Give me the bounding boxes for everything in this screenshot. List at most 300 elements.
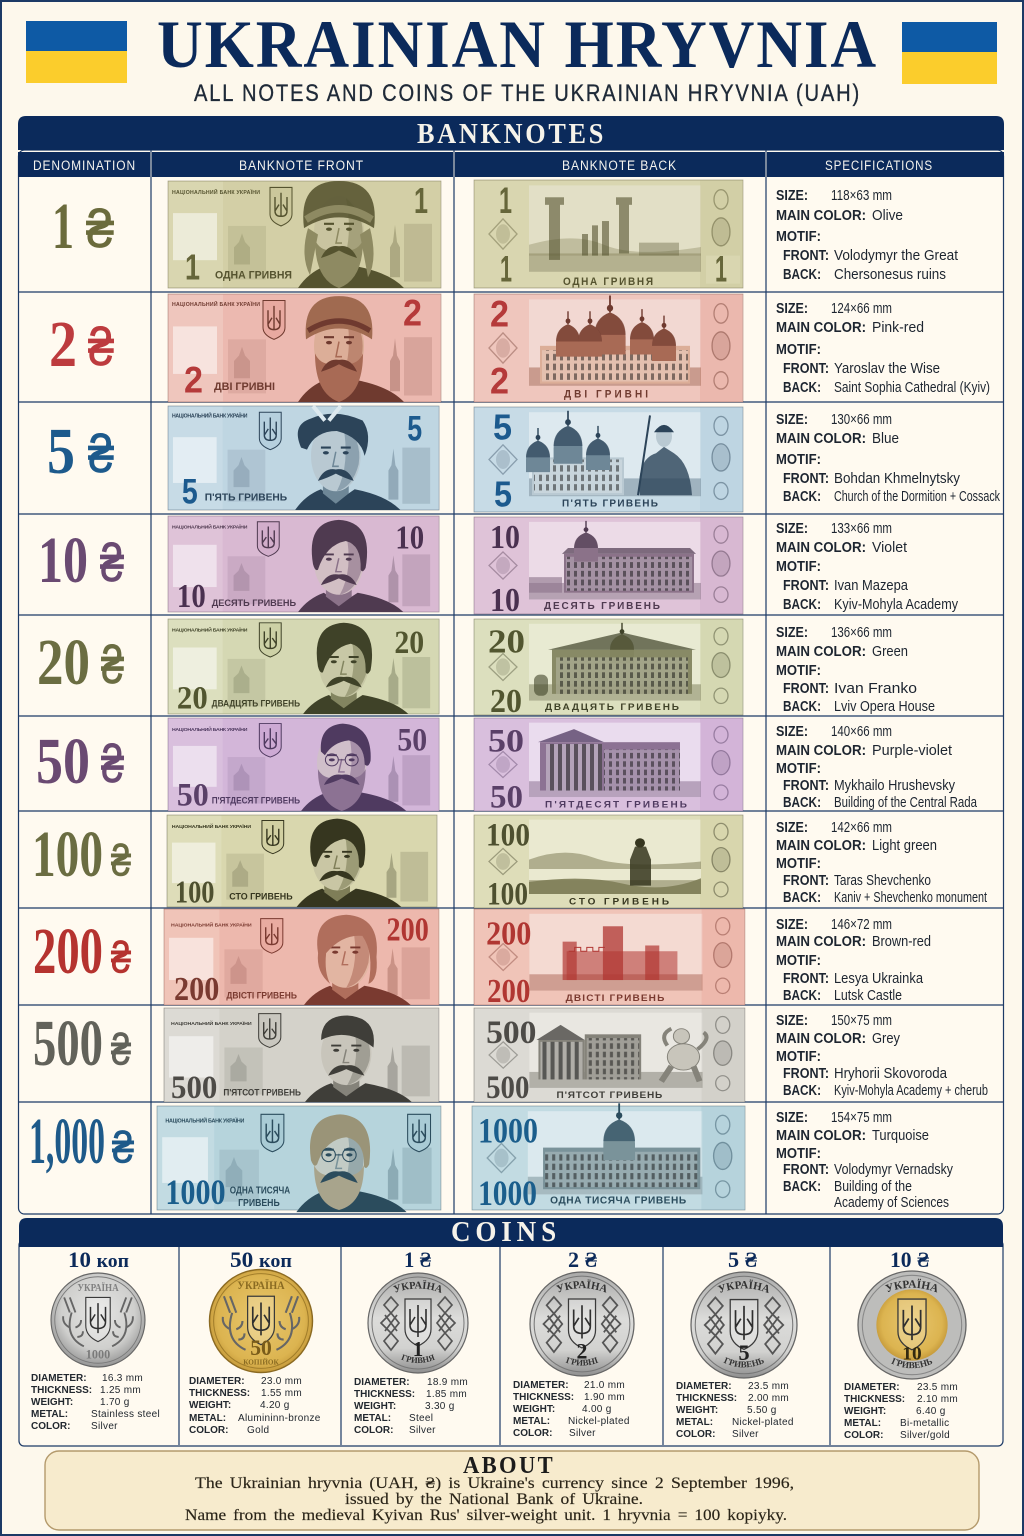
coin: 10 kopiyky bbox=[31, 1247, 160, 1432]
about text bbox=[185, 1475, 794, 1524]
specifications: 10: Ivan Mazepa bbox=[834, 578, 908, 594]
flag left bbox=[26, 21, 127, 83]
denomination: 100 hryvnia: ₴ bbox=[111, 836, 131, 885]
coin: 10 hryven: 23.5 mm bbox=[917, 1382, 958, 1393]
banknote front: 500: 500 bbox=[171, 1070, 217, 1106]
specifications: 5: BACK: bbox=[783, 489, 821, 505]
specifications: 100: Taras Shevchenko bbox=[834, 873, 931, 889]
banknote back: 1000: 1000 bbox=[478, 1110, 538, 1150]
banknote back: 10: 10 bbox=[490, 582, 520, 619]
specifications: 500: FRONT: bbox=[783, 1066, 829, 1082]
specifications: 1: MOTIF: bbox=[776, 229, 821, 245]
heading: banknotes: BANKNOTES bbox=[417, 118, 606, 150]
denomination: 10 hryvnia: ₴ bbox=[100, 534, 124, 593]
specifications: 20: Green bbox=[872, 644, 908, 660]
denomination: 200 hryvnia: 200 bbox=[33, 915, 103, 988]
denomination: 5 hryvnia bbox=[47, 415, 114, 488]
banknote back: 20: 20 bbox=[488, 623, 525, 660]
coin: 10 hryven: 10 ₴ bbox=[890, 1247, 930, 1272]
banknote back: 10: ДЕСЯТЬ ГРИВЕНЬ bbox=[544, 601, 660, 612]
coin: 5 hryven: COLOR: bbox=[676, 1429, 715, 1440]
specifications: 100: SIZE: bbox=[776, 820, 808, 836]
banknote back: 500: 500 bbox=[486, 1015, 536, 1051]
specifications: 10: 133×66 mm bbox=[831, 521, 892, 537]
coin: 1 hryvnia: Silver bbox=[409, 1425, 436, 1436]
denomination: 5 hryvnia: 5 bbox=[47, 415, 75, 488]
specifications: 20 bbox=[776, 625, 935, 715]
coin: 50 kopiyky: УКРАЇНА bbox=[237, 1279, 285, 1292]
table column headers: SPECIFICATIONS bbox=[825, 158, 933, 173]
specifications: 1: 118×63 mm bbox=[831, 188, 892, 204]
specifications: 2: Saint Sophia Cathedral (Kyiv) bbox=[834, 380, 990, 396]
denomination: 2 hryvnia: 2 bbox=[49, 308, 77, 381]
denomination: 1 hryvnia: ₴ bbox=[86, 200, 114, 259]
coin: 10 hryven: 6.40 g bbox=[916, 1406, 946, 1417]
coin: 50 kopiyky: 50 bbox=[250, 1336, 272, 1360]
banknote front: 500: НАЦІОНАЛЬНИЙ БАНК УКРАЇНИ bbox=[171, 1019, 252, 1027]
coin: 2 hryvni: 4.00 g bbox=[582, 1404, 612, 1415]
specifications: 10: BACK: bbox=[783, 597, 821, 613]
specifications: 1000: Academy of Sciences bbox=[834, 1195, 949, 1211]
panel: banknotes table frame bbox=[18, 150, 1004, 1214]
banknote front: 100 bbox=[167, 815, 437, 910]
coin: 1 hryvnia: COLOR: bbox=[354, 1425, 393, 1436]
table column headers: BANKNOTE BACK bbox=[562, 158, 677, 173]
specifications: 20: Ivan Franko bbox=[834, 681, 917, 697]
banknote front: 100: 100 bbox=[175, 874, 214, 910]
specifications: 5: FRONT: bbox=[783, 471, 829, 487]
banknote front: 1000: НАЦІОНАЛЬНИЙ БАНК УКРАЇНИ bbox=[165, 1117, 244, 1125]
banknote back: 5 bbox=[474, 407, 743, 515]
coin: 10 kopiyky: 1000 bbox=[86, 1348, 110, 1362]
specifications: 500: MAIN COLOR: bbox=[776, 1031, 866, 1047]
coin: 1 hryvnia: УКРАЇНА bbox=[392, 1280, 442, 1293]
specifications: 1: Volodymyr the Great bbox=[834, 248, 958, 264]
banknote front: 50: П'ЯТДЕСЯТ ГРИВЕНЬ bbox=[212, 796, 300, 806]
coin: 1 hryvnia: 1.85 mm bbox=[426, 1389, 467, 1400]
banknote back: 5: П'ЯТЬ ГРИВЕНЬ bbox=[562, 499, 658, 510]
specifications: 5: MOTIF: bbox=[776, 452, 821, 468]
coin: 2 hryvni: METAL: bbox=[513, 1416, 550, 1427]
specifications: 50: 140×66 mm bbox=[831, 724, 892, 740]
banknote back: 500: П'ЯТСОТ ГРИВЕНЬ bbox=[557, 1091, 662, 1101]
heading: coins bbox=[19, 1217, 1003, 1248]
heading: coins: COINS bbox=[451, 1217, 561, 1248]
banknote back: 2: 2 bbox=[490, 361, 509, 402]
specifications: 1000: Turquoise bbox=[872, 1128, 929, 1144]
banknote back: 2: 2 bbox=[490, 294, 509, 335]
denomination: 20 hryvnia: ₴ bbox=[101, 636, 124, 695]
specifications: 10: MOTIF: bbox=[776, 559, 821, 575]
specifications: 10: SIZE: bbox=[776, 521, 808, 537]
denomination: 200 hryvnia: ₴ bbox=[111, 933, 131, 982]
coin: 5 hryven: 5 bbox=[738, 1340, 750, 1365]
coin: 5 hryven: 23.5 mm bbox=[748, 1381, 789, 1392]
coin: 2 hryvni: ГРИВНІ bbox=[566, 1357, 598, 1366]
specifications: 2: Pink-red bbox=[872, 320, 924, 336]
banknote front: 20 bbox=[168, 619, 439, 716]
specifications: 500: 150×75 mm bbox=[831, 1013, 892, 1029]
coin: 10 kopiyky: DIAMETER: bbox=[31, 1373, 87, 1384]
coin: 10 hryven: УКРАЇНА bbox=[884, 1278, 938, 1292]
banknote back: 1: ОДНА ГРИВНЯ bbox=[563, 276, 653, 288]
coin: 5 hryven: 5.50 g bbox=[747, 1405, 777, 1416]
coin: 2 hryvni: DIAMETER: bbox=[513, 1380, 569, 1391]
banknote back: 5: 5 bbox=[494, 475, 512, 515]
denomination: 50 hryvnia: ₴ bbox=[101, 735, 124, 794]
coin: 50 kopiyky: 23.0 mm bbox=[261, 1376, 302, 1387]
specifications: 20: FRONT: bbox=[783, 681, 829, 697]
banknote back: 20: ДВАДЦЯТЬ ГРИВЕНЬ bbox=[545, 702, 679, 713]
about text: Name from the medieval Kyivan Rus' silver-weight unit. 1 hryvnia = 100 kopiyky. bbox=[185, 1507, 787, 1524]
specifications: 200: Brown-red bbox=[872, 934, 931, 950]
banknote front: 1 bbox=[168, 181, 441, 288]
specifications: 1000: MAIN COLOR: bbox=[776, 1128, 866, 1144]
denomination: 5 hryvnia: ₴ bbox=[88, 425, 114, 484]
banknote back: 100: 100 bbox=[486, 818, 530, 853]
banknote back: 50: 50 bbox=[490, 779, 523, 815]
coin: 5 hryven: WEIGHT: bbox=[676, 1405, 718, 1416]
banknote front: 2: ДВІ ГРИВНІ bbox=[214, 382, 275, 393]
coin: 10 kopiyky: WEIGHT: bbox=[31, 1397, 73, 1408]
specifications: 1: FRONT: bbox=[783, 248, 829, 264]
coin: 10 kopiyky: COLOR: bbox=[31, 1421, 70, 1432]
denomination: 2 hryvnia bbox=[49, 308, 114, 381]
specifications: 100: Light green bbox=[872, 838, 937, 854]
coin: 5 hryven: УКРАЇНА bbox=[717, 1279, 769, 1294]
specifications: 500: SIZE: bbox=[776, 1013, 808, 1029]
specifications: 5: MAIN COLOR: bbox=[776, 431, 866, 447]
specifications: 50: Mykhailo Hrushevsky bbox=[834, 778, 956, 794]
banknote back: 200: 200 bbox=[486, 915, 531, 952]
coin: 10 kopiyky: 10 коп bbox=[68, 1247, 129, 1272]
banknote front: 1000: 1000 bbox=[165, 1172, 226, 1212]
coin: 5 hryven: DIAMETER: bbox=[676, 1381, 732, 1392]
specifications: 200: Lesya Ukrainka bbox=[834, 971, 923, 987]
specifications: 200: Lutsk Castle bbox=[834, 988, 902, 1004]
coin: 50 kopiyky: 4.20 g bbox=[260, 1400, 290, 1411]
banknote back: 100: СТО ГРИВЕНЬ bbox=[569, 897, 669, 907]
specifications: 50: MOTIF: bbox=[776, 761, 821, 777]
denomination: 1,000 hryvnia: ₴ bbox=[112, 1123, 134, 1172]
coin: 2 hryvni: COLOR: bbox=[513, 1428, 552, 1439]
banknote front: 1: 1 bbox=[185, 247, 200, 288]
banknote front: 1: 1 bbox=[414, 181, 428, 221]
banknote front: 5: 5 bbox=[407, 410, 422, 449]
banknote back: 2 bbox=[474, 294, 743, 402]
specifications: 2 bbox=[776, 301, 990, 396]
banknote front: 20: НАЦІОНАЛЬНИЙ БАНК УКРАЇНИ bbox=[172, 625, 248, 633]
coin: 50 kopiyky: 1.55 mm bbox=[261, 1388, 302, 1399]
denomination: 500 hryvnia: ₴ bbox=[111, 1025, 131, 1074]
coin: 50 kopiyky: 50 коп bbox=[230, 1247, 292, 1272]
banknote front: 5: НАЦІОНАЛЬНИЙ БАНК УКРАЇНИ bbox=[172, 411, 248, 419]
denomination: 2 hryvnia: ₴ bbox=[88, 318, 114, 377]
panel: coins frame bbox=[19, 1240, 1003, 1446]
specifications: 200: BACK: bbox=[783, 988, 821, 1004]
banknote back: 1: 1 bbox=[499, 181, 512, 221]
heading: about: ABOUT bbox=[463, 1453, 555, 1479]
specifications: 500: BACK: bbox=[783, 1083, 821, 1099]
coin: 1 hryvnia: METAL: bbox=[354, 1413, 391, 1424]
table column headers bbox=[18, 152, 1004, 177]
coin: 10 hryven: Bi-metallic bbox=[900, 1418, 949, 1429]
banknote back: 100: 100 bbox=[487, 876, 528, 912]
coin: 10 kopiyky: 1.25 mm bbox=[100, 1385, 141, 1396]
coin: 1 hryvnia: 18.9 mm bbox=[427, 1377, 468, 1388]
coin: 10 kopiyky: Stainless steel bbox=[91, 1409, 160, 1420]
specifications: 20: MOTIF: bbox=[776, 663, 821, 679]
coin: 50 kopiyky: METAL: bbox=[189, 1413, 226, 1424]
banknote front: 5: П'ЯТЬ ГРИВЕНЬ bbox=[205, 492, 287, 504]
specifications: 50: FRONT: bbox=[783, 778, 829, 794]
banknote back: 50: П'ЯТДЕСЯТ ГРИВЕНЬ bbox=[545, 800, 687, 810]
banknote front: 500: П'ЯТСОТ ГРИВЕНЬ bbox=[223, 1088, 301, 1098]
specifications: 2: MAIN COLOR: bbox=[776, 320, 866, 336]
denomination: 1 hryvnia: 1 bbox=[52, 190, 74, 263]
banknote front: 500 bbox=[164, 1008, 439, 1106]
banknote front: 200: 200 bbox=[387, 911, 429, 948]
specifications: 1: Olive bbox=[872, 208, 903, 224]
specifications: 5 bbox=[776, 412, 1001, 505]
banknote back: 1000: 1000 bbox=[478, 1172, 537, 1213]
banknote back: 200 bbox=[474, 909, 745, 1010]
coin: 10 hryven: THICKNESS: bbox=[844, 1394, 905, 1405]
coin: 5 hryven: 5 ₴ bbox=[728, 1247, 758, 1272]
banknote front: 2 bbox=[168, 293, 441, 402]
specifications: 1000: FRONT: bbox=[783, 1162, 829, 1178]
specifications: 200: FRONT: bbox=[783, 971, 829, 987]
banknote back: 200: ДВІСТІ ГРИВЕНЬ bbox=[566, 993, 664, 1004]
banknote back: 10: 10 bbox=[490, 519, 520, 556]
coin: 5 hryven: METAL: bbox=[676, 1417, 713, 1428]
coin: 10 hryven: COLOR: bbox=[844, 1430, 883, 1441]
specifications: 500: Hryhorii Skovoroda bbox=[834, 1066, 947, 1082]
banknote front: 100: СТО ГРИВЕНЬ bbox=[229, 892, 293, 903]
about text: issued by the National Bank of Ukraine. bbox=[345, 1491, 643, 1508]
coin: 2 hryvni: WEIGHT: bbox=[513, 1404, 555, 1415]
banknote front: 10 bbox=[168, 516, 439, 615]
coin: 5 hryven: Nickel-plated bbox=[732, 1417, 794, 1428]
specifications: 50: BACK: bbox=[783, 795, 821, 811]
banknote front: 1000: ГРИВЕНЬ bbox=[238, 1198, 280, 1209]
banknote back: 5: 5 bbox=[493, 408, 512, 448]
coin: 1 hryvnia: 1 bbox=[413, 1337, 423, 1361]
denomination: 10 hryvnia: 10 bbox=[38, 524, 88, 597]
coin: 5 hryven: Silver bbox=[732, 1429, 759, 1440]
coin: 2 hryvni: 1.90 mm bbox=[584, 1392, 625, 1403]
coin: 5 hryven: ГРИВЕНЬ bbox=[724, 1357, 764, 1368]
coin: 10 kopiyky: METAL: bbox=[31, 1409, 68, 1420]
coin: 1 hryvnia: Steel bbox=[409, 1413, 433, 1424]
about text: The Ukrainian hryvnia (UAH, ₴) is Ukraine's currency since 2 September 1996, bbox=[195, 1475, 794, 1492]
specifications: 500 bbox=[776, 1013, 988, 1099]
banknote back: 50: 50 bbox=[488, 724, 524, 759]
specifications: 50: MAIN COLOR: bbox=[776, 743, 866, 759]
specifications: 1000: MOTIF: bbox=[776, 1146, 821, 1162]
specifications: 20: SIZE: bbox=[776, 625, 808, 641]
denomination: 20 hryvnia: 20 bbox=[37, 626, 90, 699]
coin: 1 hryvnia: WEIGHT: bbox=[354, 1401, 396, 1412]
coin: 1 hryvnia: 3.30 g bbox=[425, 1401, 455, 1412]
coin: 2 hryvni: УКРАЇНА bbox=[556, 1279, 606, 1293]
banknote back: 10 bbox=[474, 517, 743, 619]
specifications: 1000: Building of the bbox=[834, 1179, 912, 1195]
specifications: 10 bbox=[776, 521, 959, 613]
banknote back: 1000 bbox=[472, 1103, 745, 1213]
specifications: 200: MOTIF: bbox=[776, 953, 821, 969]
banknote back: 500 bbox=[474, 1008, 745, 1106]
coin: 50 kopiyky: WEIGHT: bbox=[189, 1400, 231, 1411]
coin: 2 hryvni: 21.0 mm bbox=[584, 1380, 625, 1391]
specifications: 100: FRONT: bbox=[783, 873, 829, 889]
coin: 50 kopiyky: DIAMETER: bbox=[189, 1376, 245, 1387]
banknote front: 5 bbox=[168, 406, 439, 512]
banknote back: 1 bbox=[474, 180, 743, 290]
specifications: 1: MAIN COLOR: bbox=[776, 208, 866, 224]
coin: 2 hryvni: 2 bbox=[577, 1339, 587, 1363]
coin: 1 hryvnia: THICKNESS: bbox=[354, 1389, 415, 1400]
banknote front: 50: 50 bbox=[177, 777, 209, 813]
banknote front: 200: НАЦІОНАЛЬНИЙ БАНК УКРАЇНИ bbox=[171, 920, 252, 928]
coin: 50 kopiyky: Gold bbox=[247, 1425, 269, 1436]
banknote front: 20: ДВАДЦЯТЬ ГРИВЕНЬ bbox=[212, 699, 300, 709]
specifications: 1 bbox=[776, 188, 958, 283]
specifications: 1000: Volodymyr Vernadsky bbox=[834, 1162, 954, 1178]
banknote back: 20: 20 bbox=[490, 683, 522, 720]
coin: 50 kopiyky: COLOR: bbox=[189, 1425, 228, 1436]
specifications: 100: BACK: bbox=[783, 890, 821, 906]
specifications: 5: 130×66 mm bbox=[831, 412, 892, 428]
specifications: 20: 136×66 mm bbox=[831, 625, 892, 641]
specifications: 1000: SIZE: bbox=[776, 1110, 808, 1126]
specifications: 200: 146×72 mm bbox=[831, 917, 892, 933]
coin: 10 kopiyky: 16.3 mm bbox=[102, 1373, 143, 1384]
banknote front: 10: 10 bbox=[395, 520, 424, 557]
specifications: 500: MOTIF: bbox=[776, 1049, 821, 1065]
specifications: 50: Purple-violet bbox=[872, 743, 952, 759]
banknote front: 10: 10 bbox=[177, 579, 206, 615]
coin: 10 hryven: Silver/gold bbox=[900, 1430, 950, 1441]
specifications: 1: SIZE: bbox=[776, 188, 808, 204]
banknote front: 1: ОДНА ГРИВНЯ bbox=[215, 270, 292, 281]
specifications: 20: BACK: bbox=[783, 699, 821, 715]
specifications: 20: MAIN COLOR: bbox=[776, 644, 866, 660]
coin: 1 hryvnia: 1 ₴ bbox=[404, 1247, 432, 1272]
table column headers: DENOMINATION bbox=[33, 158, 136, 173]
specifications: 5: SIZE: bbox=[776, 412, 808, 428]
title: UKRAINIAN HRYVNIA bbox=[157, 6, 878, 82]
banknote back: 200: 200 bbox=[487, 973, 530, 1010]
specifications: 10: Violet bbox=[872, 540, 907, 556]
specifications: 5: Blue bbox=[872, 431, 899, 447]
heading: banknotes bbox=[18, 116, 1004, 150]
panel: about bbox=[45, 1451, 979, 1530]
specifications: 10: Kyiv-Mohyla Academy bbox=[834, 597, 959, 613]
coin: 10 hryven: 10 bbox=[902, 1344, 922, 1365]
banknote front: 100: НАЦІОНАЛЬНИЙ БАНК УКРАЇНИ bbox=[172, 822, 252, 830]
banknote back: 1: 1 bbox=[500, 249, 512, 290]
specifications: 50: SIZE: bbox=[776, 724, 808, 740]
coin: 10 hryven: WEIGHT: bbox=[844, 1406, 886, 1417]
specifications: 1: BACK: bbox=[783, 267, 821, 283]
specifications: 200 bbox=[776, 917, 931, 1004]
banknote front: 5: 5 bbox=[182, 473, 198, 512]
banknote front: 20: 20 bbox=[177, 680, 208, 716]
banknote front: 1: НАЦІОНАЛЬНИЙ БАНК УКРАЇНИ bbox=[172, 188, 260, 196]
banknote front: 1000 bbox=[157, 1106, 441, 1212]
coin: 5 hryven bbox=[676, 1247, 798, 1440]
coin: 10 hryven bbox=[844, 1247, 967, 1441]
coin: 50 kopiyky bbox=[189, 1247, 321, 1436]
banknote back: 50 bbox=[474, 718, 743, 815]
specifications: 2: Yaroslav the Wise bbox=[834, 361, 940, 377]
specifications: 10: FRONT: bbox=[783, 578, 829, 594]
banknote back: 1: 1 bbox=[715, 249, 727, 290]
coin: 1 hryvnia: ГРИВНЯ bbox=[400, 1354, 436, 1364]
banknote front: 50 bbox=[168, 718, 439, 813]
table column headers: BANKNOTE FRONT bbox=[239, 158, 364, 173]
specifications: 100: 142×66 mm bbox=[831, 820, 892, 836]
denomination: 1,000 hryvnia: 1,000 bbox=[29, 1105, 105, 1178]
specifications: 1: Chersonesus ruins bbox=[834, 267, 946, 283]
specifications: 2: SIZE: bbox=[776, 301, 808, 317]
coin: 50 kopiyky: КОПІЙОК bbox=[243, 1357, 280, 1366]
coin: 10 kopiyky: 1.70 g bbox=[100, 1397, 130, 1408]
specifications: 200: SIZE: bbox=[776, 917, 808, 933]
denomination: 500 hryvnia: 500 bbox=[33, 1007, 103, 1080]
banknote back: 500: 500 bbox=[486, 1070, 529, 1106]
flag right bbox=[902, 22, 997, 84]
coin: 10 kopiyky: THICKNESS: bbox=[31, 1385, 92, 1396]
banknote front: 1000: ОДНА ТИСЯЧА bbox=[230, 1185, 291, 1196]
coin: 10 kopiyky: Silver bbox=[91, 1421, 118, 1432]
coin: 5 hryven: 2.00 mm bbox=[748, 1393, 789, 1404]
coin: 2 hryvni: Silver bbox=[569, 1428, 596, 1439]
specifications: 100 bbox=[776, 820, 987, 906]
banknote front: 200: ДВІСТІ ГРИВЕНЬ bbox=[226, 990, 297, 1001]
coin: 10 kopiyky: УКРАЇНА bbox=[77, 1281, 119, 1294]
specifications: 50: Building of the Central Rada bbox=[834, 795, 977, 811]
specifications: 20: Lviv Opera House bbox=[834, 699, 935, 715]
specifications: 100: MOTIF: bbox=[776, 856, 821, 872]
specifications: 2: FRONT: bbox=[783, 361, 829, 377]
specifications: 1000: BACK: bbox=[783, 1179, 821, 1195]
specifications: 50 bbox=[776, 724, 977, 811]
coin: 10 hryven: ГРИВЕНЬ bbox=[891, 1358, 932, 1368]
banknote front: 200: 200 bbox=[174, 971, 219, 1008]
specifications: 1000 bbox=[776, 1110, 954, 1211]
banknote front: 50: НАЦІОНАЛЬНИЙ БАНК УКРАЇНИ bbox=[172, 725, 248, 733]
banknote front: 2: НАЦІОНАЛЬНИЙ БАНК УКРАЇНИ bbox=[172, 300, 260, 308]
denomination: 1 hryvnia bbox=[52, 190, 114, 263]
banknote front: 2: 2 bbox=[403, 293, 422, 334]
coin: 2 hryvni: Nickel-plated bbox=[568, 1416, 630, 1427]
specifications: 10: MAIN COLOR: bbox=[776, 540, 866, 556]
banknote back: 20 bbox=[474, 619, 743, 720]
banknote front: 10: НАЦІОНАЛЬНИЙ БАНК УКРАЇНИ bbox=[172, 523, 248, 530]
specifications: 2: BACK: bbox=[783, 380, 821, 396]
banknote front: 20: 20 bbox=[394, 625, 424, 661]
banknote back: 1000: ОДНА ТИСЯЧА ГРИВЕНЬ bbox=[550, 1196, 687, 1207]
subtitle: ALL NOTES AND COINS OF THE UKRAINIAN HRYVNIA (UAH) bbox=[194, 80, 861, 107]
coin: 50 kopiyky: Alumininn-bronze bbox=[238, 1413, 321, 1424]
coin: 10 hryven: 2.10 mm bbox=[917, 1394, 958, 1405]
specifications: 5: Bohdan Khmelnytsky bbox=[834, 471, 961, 487]
coin: 50 kopiyky: THICKNESS: bbox=[189, 1388, 250, 1399]
banknote front: 50: 50 bbox=[397, 723, 427, 758]
coin: 10 hryven: DIAMETER: bbox=[844, 1382, 900, 1393]
